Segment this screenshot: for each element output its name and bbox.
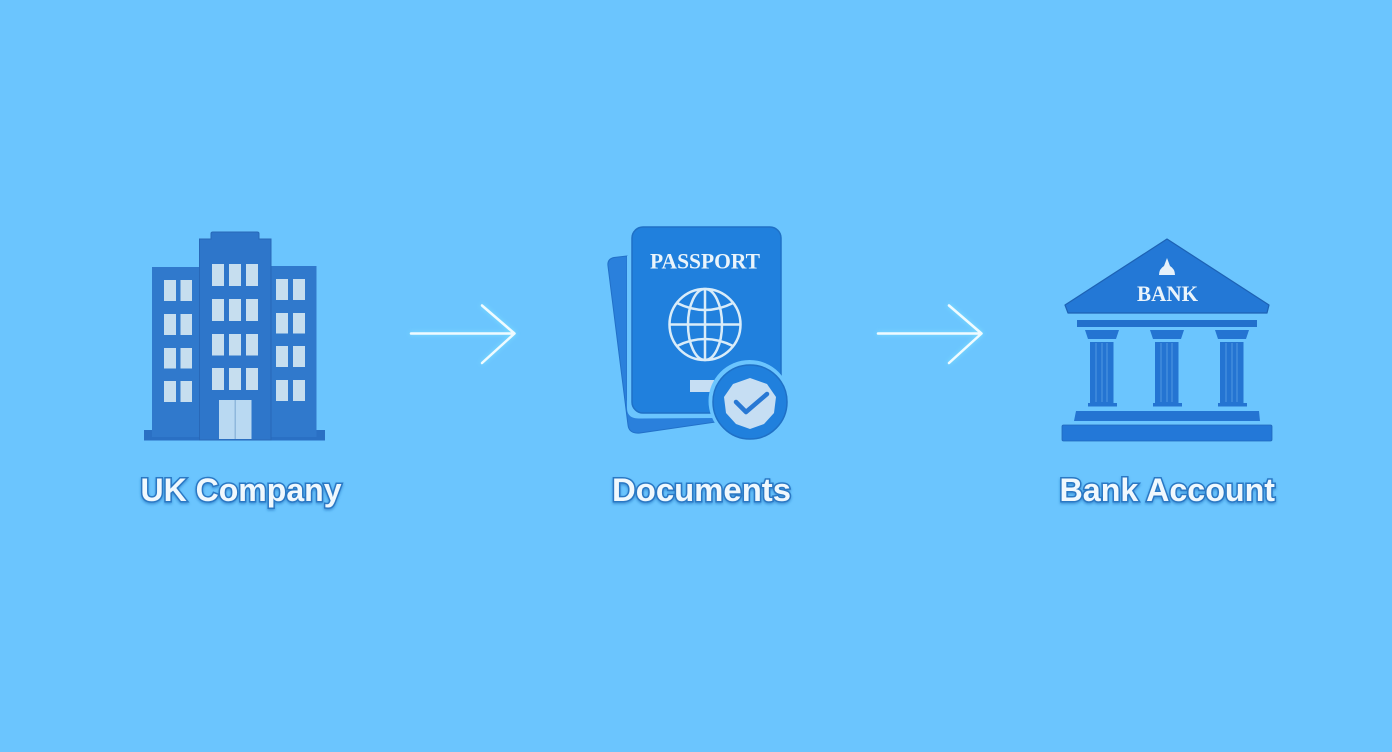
columns [1085,330,1249,406]
central tower [200,232,271,440]
bank heading: BANK [1137,281,1198,306]
upper step [1074,411,1260,421]
passport cover [632,227,781,413]
icon: passport with verification badge [608,227,790,442]
label: Bank Account: Bank Account [1060,472,1275,508]
icon: bank building [1062,239,1272,441]
right wing [271,266,316,437]
back document sheet [608,256,716,433]
windows: central tower [212,264,258,390]
column fluting [1096,343,1237,402]
bell emblem [1159,258,1175,275]
icon: office building [144,232,325,440]
label: Documents: Documents [612,472,791,508]
light gap around passport [627,256,716,419]
arrow: company to documents [411,306,514,363]
passport bar [690,380,714,392]
arrow: documents to bank [878,306,982,363]
verification badge [708,360,790,442]
windows: right wing [276,279,305,401]
left wing [152,267,199,437]
passport heading: PASSPORT [650,248,760,274]
windows: left wing [164,280,192,402]
entablature [1077,320,1257,327]
label: UK Company: UK Company [140,472,342,508]
globe emblem [670,289,740,360]
entrance door [219,400,252,439]
building base [144,430,325,440]
pediment roof [1065,239,1269,313]
lower step [1062,425,1272,441]
